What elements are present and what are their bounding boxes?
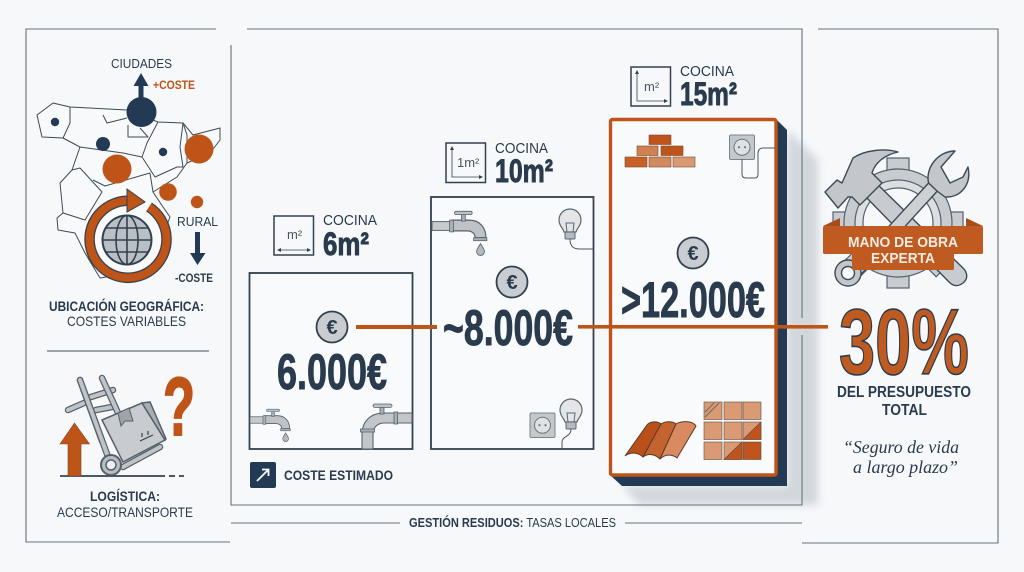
quote: a largo plazo” (853, 457, 958, 477)
icon: socket (530, 413, 555, 438)
icon: euro coin: € (506, 272, 518, 294)
box 6m2 (250, 273, 412, 449)
footer: gestión residuos: GESTIÓN RESIDUOS: TASAS LOCALES (409, 515, 616, 530)
label ciudades: CIUDADES (111, 56, 172, 71)
big number 30%: 30% (839, 290, 969, 394)
city dots (51, 97, 213, 208)
icon: small faucet (250, 409, 290, 442)
heading logística: LOGÍSTICA: (90, 488, 160, 504)
shadow of box 15m2 (622, 130, 818, 505)
size label 6m2: 6m² (323, 226, 369, 262)
icon: elbow pipe faucet (360, 404, 412, 449)
icon: roof tiles (625, 422, 696, 459)
icon: faucet (432, 211, 487, 255)
icon: question mark: ? (163, 360, 195, 453)
subheading acceso transporte: ACCESO/TRANSPORTE (57, 504, 193, 520)
size label 10m2: 10m² (495, 153, 553, 189)
legend: coste estimado (250, 462, 393, 488)
label menos coste: -COSTE (175, 271, 213, 285)
size label 10m2: 1m² (457, 155, 480, 170)
caption presupuesto: TOTAL (882, 402, 927, 419)
panel: cocina 6m2 (250, 212, 412, 449)
quote: “Seguro de vida (843, 437, 959, 457)
icon: euro coin (496, 266, 528, 298)
banner: MANO DE OBRA (848, 234, 958, 251)
icon: hammer (825, 150, 967, 286)
icon: euro coin: € (687, 243, 699, 265)
icon: wrench (835, 151, 969, 286)
legend: coste estimado: COSTE ESTIMADO (284, 468, 393, 483)
price 8.000: ~8.000€ (443, 300, 573, 356)
size label 6m2: COCINA (323, 212, 377, 229)
size label 10m2 (446, 140, 553, 189)
icon: globe with circular arrow (89, 189, 167, 278)
size label 6m2: m² (287, 227, 303, 242)
caption presupuesto (837, 384, 971, 419)
icon: bulb top (559, 209, 593, 249)
price 12.000: >12.000€ (621, 272, 765, 328)
icon: euro coin (316, 312, 348, 342)
arrow down (190, 232, 206, 265)
icon: orange up arrow (60, 423, 90, 476)
panel: cocina 10m2 (431, 140, 594, 449)
label rural: RURAL (177, 214, 218, 229)
icon: gear (833, 158, 963, 288)
size label 6m2 (274, 212, 377, 262)
navy extrusion (610, 119, 787, 486)
size label 10m2: COCINA (495, 140, 548, 157)
box 15m2 (610, 120, 776, 475)
size label 15m2: m² (644, 79, 660, 94)
panel: ubicación geográfica (37, 56, 220, 329)
icon: bricks (625, 135, 695, 167)
arrow up (134, 73, 148, 98)
heading ubicación: UBICACIÓN GEOGRÁFICA: (49, 297, 204, 314)
connector line (356, 325, 828, 329)
caption presupuesto: DEL PRESUPUESTO (837, 384, 971, 401)
icon: hand truck with box (60, 378, 184, 476)
label más coste: +COSTE (153, 78, 195, 92)
quote (843, 437, 959, 477)
box 10m2 (431, 197, 594, 449)
panel: cocina 15m2 (610, 63, 787, 486)
price 6.000: 6.000€ (277, 344, 387, 400)
icon: euro coin (678, 238, 708, 268)
size label 15m2: 15m² (680, 76, 737, 112)
icon: socket with cable (730, 135, 775, 178)
icon: euro coin: € (326, 317, 338, 339)
panel: mano de obra (823, 150, 983, 477)
icon: wall tiles (704, 402, 761, 460)
banner (823, 218, 983, 270)
size label 15m2 (631, 63, 737, 112)
icon: bulb bottom (560, 399, 582, 449)
banner: EXPERTA (871, 250, 935, 267)
map of Spain (37, 103, 220, 278)
size label 15m2: COCINA (680, 63, 734, 80)
subheading costes variables: COSTES VARIABLES (67, 313, 186, 329)
panel: logística (57, 360, 195, 520)
